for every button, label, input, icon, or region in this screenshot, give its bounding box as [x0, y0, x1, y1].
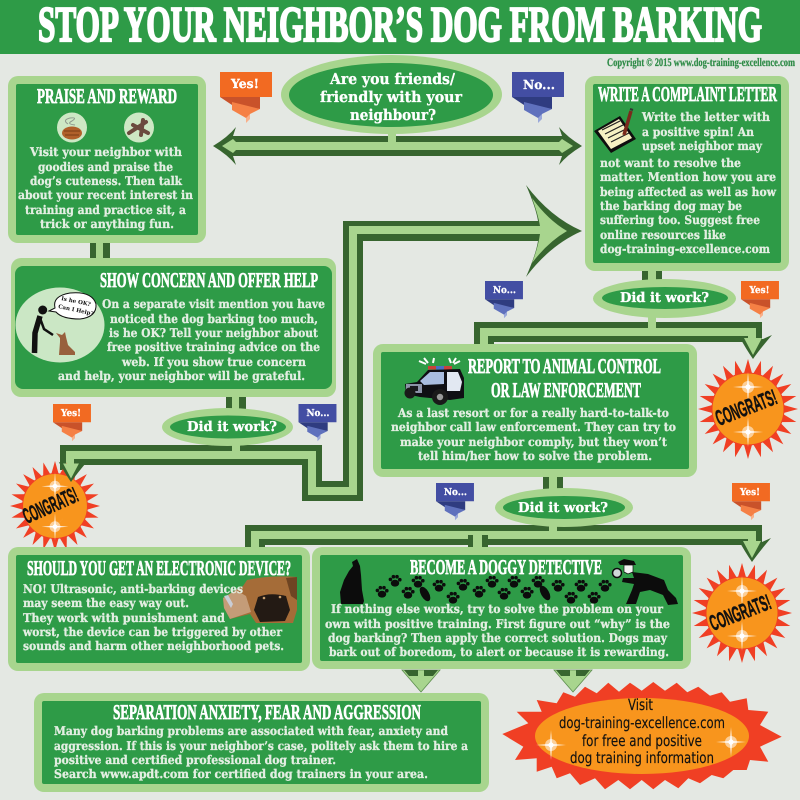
body text: praise: trick or anything fun.: [40, 217, 174, 231]
body text: doggy detective: dog barking? Then apply the correct solution. Dogs may: [328, 631, 668, 645]
body text: report: neighbor call law enforcement. They can try to: [391, 420, 676, 434]
body text: complaint: not want to resolve the: [600, 156, 741, 170]
badge: yes beside oval 1: Yes!: [60, 408, 81, 419]
body text: show concern: noticed the dog barking too much,: [110, 312, 318, 326]
question oval: Are you friends/: [329, 70, 455, 88]
body text: separation anxiety: Many dog barking problems are associated with fear, anxiety and: [54, 724, 449, 738]
body text: report: As a last resort or for a really hard-to-talk-to: [397, 406, 669, 420]
body text: complaint: being affected as well as how: [600, 185, 777, 199]
body text: show concern: web. If you show true concern: [121, 355, 306, 369]
did it work oval 3: Did it work?: [518, 500, 608, 516]
badge: no beside oval 1: No...: [306, 408, 330, 419]
heading: doggy detective: BECOME A DOGGY DETECTIVE: [410, 555, 602, 579]
arrowhead into congrats 3: [738, 538, 771, 562]
body text: doggy detective: own with positive training. First figure out “why” is the: [325, 617, 670, 631]
body text: report: make your neighbor comply, but they won’t: [400, 435, 667, 449]
arrowhead to visit burst: [554, 670, 592, 692]
body text: complaint: a positive spin! An: [642, 125, 754, 139]
body text: complaint: online resources like: [600, 228, 726, 242]
body text: complaint: [600, 110, 777, 256]
heading: report to animal control: OR LAW ENFORCEMENT: [491, 378, 641, 402]
body text: praise: training and practice sit, a: [25, 203, 186, 217]
icon: person talking to dog: Is he OK?: [61, 295, 91, 308]
panel: separation anxiety, fear and aggression: [34, 693, 489, 792]
arrow: yes path to first congrats: [70, 440, 240, 472]
body text: report: tell him/her how to solve the problem.: [418, 449, 652, 463]
badge: top no: No...: [523, 77, 555, 92]
icon: police car: [404, 358, 464, 405]
badge: no beside oval 2: No...: [493, 285, 516, 296]
visit callout burst: Visit: [628, 696, 653, 714]
did it work oval 1: [162, 408, 293, 446]
badge: yes beside oval 3: [732, 483, 770, 520]
did it work oval 3: [495, 488, 633, 527]
question oval: [281, 55, 502, 134]
icon: howling dog silhouette: [340, 559, 364, 604]
visit callout burst: [502, 682, 782, 789]
badge: top yes: [220, 72, 272, 123]
panel: show concern and offer help: [11, 258, 336, 397]
panel: should you get an electronic device: [8, 547, 310, 671]
icon: person talking to dog: Can I Help?: [58, 303, 94, 317]
body text: electronic device: [22, 582, 284, 653]
body text: complaint: Write the letter with: [641, 110, 770, 124]
visit callout burst: dog training information: [570, 749, 714, 767]
heading: electronic device: SHOULD YOU GET AN ELECTRONIC DEVICE?: [27, 556, 291, 580]
icon: dog treats in a bowl: [57, 112, 87, 142]
congrats burst 1: [10, 461, 100, 551]
body text: separation anxiety: aggression. If this is your neighbor’s case, politely ask them to hire a: [54, 739, 468, 753]
badge: yes beside oval 1: [53, 404, 91, 441]
body text: doggy detective: If nothing else works, try to solve the problem on your: [331, 602, 664, 616]
badge: no beside oval 2: [485, 281, 523, 318]
photo: boxer dog: [223, 576, 297, 623]
badge: yes beside oval 2: Yes!: [749, 285, 770, 296]
arrowhead into congrats 2: [739, 335, 772, 359]
badge: no beside oval 3: No...: [444, 487, 467, 498]
body text: show concern: is he OK? Tell your neighbor about: [109, 326, 318, 340]
body text: praise: Visit your neighbor with: [29, 145, 182, 159]
panel: report to animal control: [373, 344, 697, 477]
body text: complaint: the barking dog may be: [600, 199, 742, 213]
body text: complaint: upset neighbor may: [642, 139, 763, 153]
arrowhead into congrats 1: [59, 461, 88, 482]
did it work oval 1: Did it work?: [187, 419, 277, 435]
body text: praise: [18, 145, 193, 231]
visit callout burst: dog-training-excellence.com: [559, 714, 725, 732]
body text: electronic device: may seem the easy way out.: [23, 596, 189, 610]
body text: separation anxiety: Search www.apdt.com for certified dog trainers in your area.: [54, 767, 428, 781]
body text: complaint: matter. Mention how you are: [600, 170, 776, 184]
heading: report to animal control: REPORT TO ANIMAL CONTROL: [468, 354, 661, 378]
body text: complaint: dog-training-excellence.com: [600, 242, 770, 256]
body text: show concern: [58, 297, 325, 383]
body text: separation anxiety: positive and certified professional dog trainer.: [54, 753, 336, 767]
body text: praise: about your recent interest in: [18, 188, 193, 202]
heading: praise and reward: PRAISE AND REWARD: [37, 84, 177, 108]
body text: electronic device: worst, the device can be triggered by other: [22, 625, 283, 639]
heading: show concern: SHOW CONCERN AND OFFER HELP: [100, 268, 318, 292]
body text: show concern: free positive training advice on the: [107, 340, 320, 354]
badge: top no: [512, 72, 564, 123]
icon: letter and pencil: [594, 109, 636, 153]
body text: doggy detective: [325, 602, 670, 659]
congrats burst 3: [692, 563, 792, 663]
body text: electronic device: sounds and harm other neighborhood pets.: [23, 639, 284, 653]
question oval: neighbour?: [350, 106, 436, 124]
icon: paw prints trail: [376, 575, 612, 604]
arrow: top two-way arrow: [213, 127, 582, 165]
question oval: friendly with your: [320, 88, 463, 106]
panel: become a doggy detective: [312, 547, 691, 669]
body text: praise: dog’s cuteness. Then talk: [30, 174, 183, 188]
did it work oval 2: [593, 279, 736, 318]
congrats burst 1: CONGRATS!: [19, 482, 82, 529]
icon: person talking to dog: [16, 288, 104, 362]
badge: yes beside oval 2: [741, 281, 779, 318]
body text: complaint: suffering too. Suggest free: [600, 213, 760, 227]
congrats burst 2: [698, 359, 798, 459]
connectors between panels: [90, 240, 662, 490]
arrow: lower connector paths: [255, 520, 752, 552]
panel: write a complaint letter: [585, 76, 789, 271]
body text: electronic device: They work with punishment and: [23, 611, 226, 625]
badge: yes beside oval 3: Yes!: [739, 487, 760, 498]
body text: show concern: On a separate visit mention you have: [102, 297, 325, 311]
arrow: report connector paths: [484, 316, 752, 350]
body text: show concern: and help, your neighbor will be grateful.: [58, 369, 305, 383]
body text: doggy detective: bark out of boredom, to alert or because it is rewarding.: [329, 645, 669, 659]
heading: report to animal control: [468, 354, 661, 402]
body text: separation anxiety: [54, 724, 468, 781]
did it work oval 2: Did it work?: [620, 290, 709, 306]
badge: no beside oval 3: [436, 483, 474, 520]
arrowhead to separation panel: [402, 670, 440, 692]
badge: top yes: Yes!: [230, 76, 259, 91]
visit callout burst: for free and positive: [582, 732, 702, 750]
panel: praise and reward: [8, 76, 206, 243]
icon: detective with magnifying glass: [612, 559, 678, 605]
icon: dog bones: [124, 112, 154, 142]
arrow: no path to complaint letter: [240, 185, 582, 491]
body text: praise: goodies and praise the: [38, 160, 173, 174]
heading: separation anxiety: SEPARATION ANXIETY, FEAR AND AGGRESSION: [113, 700, 421, 724]
body text: report: [391, 406, 676, 463]
body text: electronic device: NO! Ultrasonic, anti-barking devices: [23, 582, 243, 596]
badge: no beside oval 1: [298, 404, 336, 441]
